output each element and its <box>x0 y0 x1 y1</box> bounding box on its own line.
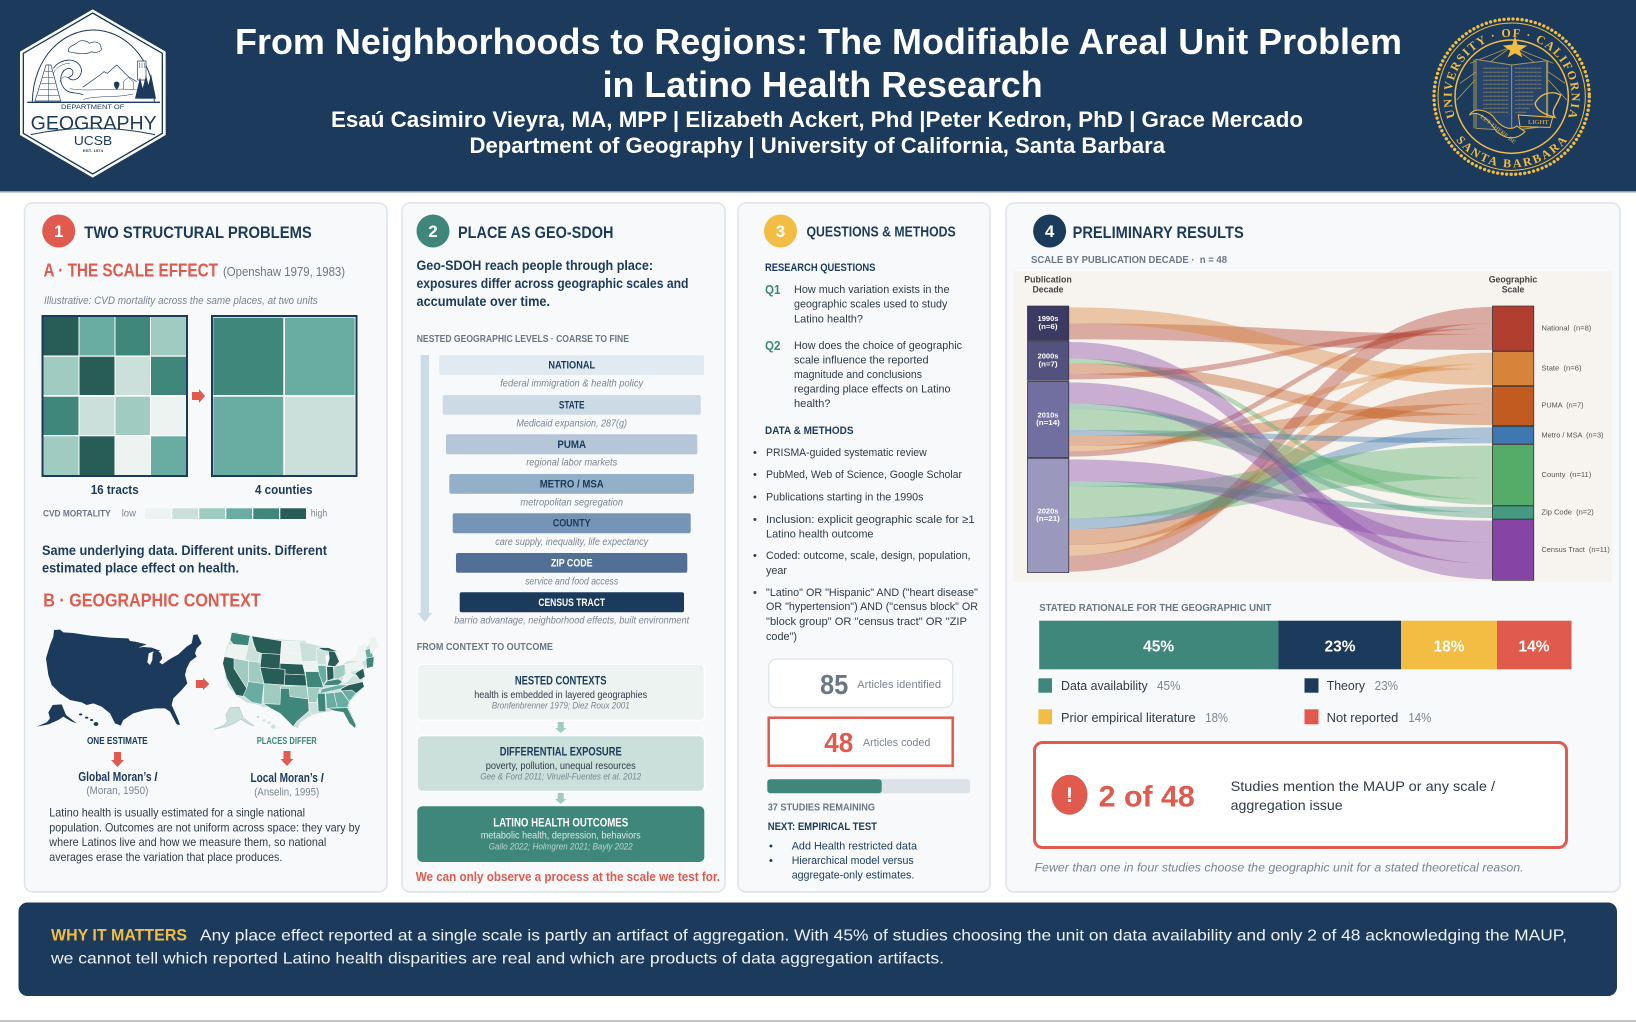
level: census tract <box>454 592 690 627</box>
icon: University of California seal: UNIVERSITY · OF · CALIFORNIA <box>1444 29 1580 119</box>
sankey axis labels: Decade <box>1032 284 1064 294</box>
scale labels: Zip Code (n=2) <box>1542 508 1594 517</box>
level: PUMA: regional labor markets <box>526 458 617 469</box>
section label: data and methods: DATA & METHODS <box>765 425 854 437</box>
progress bar <box>767 779 970 793</box>
banner: why it matters <box>18 902 1617 996</box>
bullet list: next steps: Add Health restricted data <box>792 841 918 853</box>
callout text: aggregation issue <box>1231 797 1343 813</box>
logo: UCSB Department of Geography: EST. 1974 <box>83 149 103 153</box>
question 2 <box>765 339 962 410</box>
sankey axis labels: Publication <box>1024 275 1072 285</box>
paragraph: national averages: where Latinos live and how we measure them, so national <box>48 835 326 849</box>
decade labels: 2000s <box>1038 351 1058 360</box>
grid labels: 4 counties <box>255 482 312 497</box>
sankey nodes: decades <box>1028 306 1069 573</box>
logo: UCSB Department of Geography: DEPARTMENT OF <box>61 105 125 111</box>
heading: two structural problems: TWO STRUCTURAL PROBLEMS <box>84 223 312 242</box>
level: state: Medicaid expansion, 287(g) <box>516 419 627 430</box>
bullet list: next steps: • <box>769 855 773 867</box>
sankey nodes: scales <box>1492 306 1534 580</box>
icon: University of California seal: LET THERE BE <box>1479 114 1517 146</box>
bullet list: next steps: Hierarchical model versus <box>792 855 914 867</box>
takeaway text: estimated place effect on health. <box>42 560 239 576</box>
level: PUMA <box>446 434 697 469</box>
section label: stated rationale: STATED RATIONALE FOR THE GEOGRAPHIC UNIT <box>1039 602 1272 614</box>
level: zip code: ZIP CODE <box>551 558 593 570</box>
badge 4: 4 <box>1045 222 1055 241</box>
subheading: scale effect: A · THE SCALE EFFECT <box>44 260 219 281</box>
arrow: tracts to counties <box>192 389 205 403</box>
method: Global Moran's I <box>78 769 157 797</box>
note: illustrative: Illustrative: CVD mortality across the same places, at two units <box>44 295 318 307</box>
stacked bar: rationale: 45% <box>1143 639 1174 656</box>
callout text <box>1231 778 1495 813</box>
callout text: Studies mention the MAUP or any scale / <box>1231 778 1495 794</box>
heading: preliminary results: PRELIMINARY RESULTS <box>1073 223 1244 242</box>
panel 1: two structural problems <box>24 203 387 892</box>
intro text <box>416 257 688 309</box>
scale labels: Metro / MSA (n=3) <box>1542 430 1604 439</box>
method: Local Moran's I <box>250 770 324 799</box>
level: national: NATIONAL <box>548 360 595 372</box>
icon: University of California seal <box>1432 17 1591 176</box>
decade labels: 2010s <box>1038 410 1058 419</box>
subheading: scale effect <box>44 260 345 281</box>
decade labels <box>1036 314 1060 523</box>
scale labels: Census Tract (n=11) <box>1542 545 1610 554</box>
scale labels: PUMA (n=7) <box>1542 401 1584 410</box>
badge 3 <box>764 214 797 248</box>
stacked bar: rationale: 18% <box>1434 639 1464 656</box>
bullet list: methods: PubMed, Web of Science, Google Scholar <box>766 469 962 481</box>
stat: articles coded: Articles coded <box>863 737 930 749</box>
header banner <box>0 0 1636 192</box>
level: national: federal immigration & health policy <box>500 379 644 390</box>
banner: why it matters: Any place effect reported at a single scale is partly an artifact of aggregation. With 45% of studies choosing the unit on data availability and only 2 of 48 acknowledging the MAUP, <box>200 928 1567 945</box>
question 1: How much variation exists in the <box>794 284 950 296</box>
arrow: to Local Moran's I <box>280 751 294 766</box>
stat: articles identified <box>769 659 953 708</box>
question 1 <box>765 283 950 326</box>
level: county: care supply, inequality, life expectancy <box>495 537 649 548</box>
map: single national estimate <box>37 630 202 727</box>
legend: CVD mortality: low <box>122 509 137 520</box>
section label: research questions: RESEARCH QUESTIONS <box>765 262 875 274</box>
authors and department: Esaú Casimiro Vieyra, MA, MPP | Elizabeth Ackert, Phd |Peter Kedron, PhD | Grace Mercado <box>331 107 1303 132</box>
legend: rationale: Not reported <box>1327 711 1398 725</box>
scale labels: County (n=11) <box>1542 470 1592 479</box>
arrow: context to exposure <box>555 722 566 733</box>
grid labels: 16 tracts <box>91 482 139 497</box>
decade labels: 1990s <box>1038 314 1058 323</box>
paragraph: national averages: averages erase the variation that place produces. <box>49 850 282 864</box>
box: differential exposure: Gee & Ford 2011; Viruell-Fuentes et al. 2012 <box>480 772 641 782</box>
bullet list: methods: • <box>753 447 757 459</box>
paragraph: national averages: population. Outcomes are not uniform across space: they vary by <box>49 821 360 835</box>
box: nested contexts: Bronfenbrenner 1979; Diez Roux 2001 <box>492 701 630 711</box>
legend: CVD mortality <box>43 508 327 520</box>
box: nested contexts: health is embedded in layered geographies <box>474 689 647 701</box>
sankey axis labels: Geographic <box>1489 275 1537 285</box>
badge 1 <box>42 214 75 248</box>
badge 2: 2 <box>428 222 438 241</box>
note: fewer than one in four: Fewer than one in four studies choose the geographic unit for a stated theoretical reason. <box>1034 861 1524 875</box>
level: metro <box>449 474 694 509</box>
bullet list: methods: • <box>753 492 757 504</box>
takeaway text: Same underlying data. Different units. Different <box>42 542 327 558</box>
question 1: Latino health? <box>794 314 863 326</box>
label: studies remaining: 37 STUDIES REMAINING <box>768 803 875 814</box>
map grid: 4 counties <box>212 316 356 476</box>
level: zip code: service and food access <box>525 577 618 588</box>
question 2: How does the choice of geographic <box>794 340 962 352</box>
scale labels: State (n=6) <box>1542 364 1582 373</box>
stat: articles coded: 48 <box>824 727 853 758</box>
badge 3: 3 <box>776 222 785 241</box>
logo: UCSB Department of Geography: GEOGRAPHY <box>31 113 157 134</box>
question 2: health? <box>794 398 830 410</box>
label: places differ: PLACES DIFFER <box>257 736 317 747</box>
method: Global Moran's I: Global Moran’s I <box>78 769 157 784</box>
bullet list: methods: "block group" OR "census tract" OR "ZIP <box>766 616 967 628</box>
arrow: to Global Moran's I <box>111 752 124 767</box>
level: state <box>443 395 701 430</box>
icon: exclamation: ! <box>1066 784 1073 807</box>
level: census tract: barrio advantage, neighborhood effects, built environment <box>454 616 690 627</box>
icon: University of California seal: SANTA BARBARA <box>1456 136 1568 168</box>
level: census tract: CENSUS TRACT <box>538 597 605 609</box>
bullet list: methods: OR "hypertension") AND ("census block" OR <box>766 601 978 613</box>
bullet list: next steps: • <box>769 841 773 853</box>
bullet list: methods: Publications starting in the 1990s <box>766 492 924 504</box>
section label: context to outcome: FROM CONTEXT TO OUTCOME <box>417 642 553 653</box>
box: latino health outcomes: Gallo 2022; Holmgren 2021; Bayly 2022 <box>489 842 633 852</box>
section label: nested levels: NESTED GEOGRAPHIC LEVELS · COARSE TO FINE <box>417 334 629 345</box>
callout number: 2 of 48 <box>1099 781 1195 814</box>
question 1: Q1 <box>765 283 781 297</box>
sankey axis labels: Scale <box>1502 284 1524 294</box>
sankey chart <box>1013 271 1612 582</box>
title <box>235 21 1402 105</box>
intro text: Geo-SDOH reach people through place: <box>416 257 653 273</box>
bullet list: methods: code") <box>766 631 797 643</box>
level: state: STATE <box>559 400 585 412</box>
decade labels: 2020s <box>1038 506 1058 515</box>
level: metro: metropolitan segregation <box>520 498 623 509</box>
bullet list: methods: • <box>753 587 757 599</box>
box: latino health outcomes: metabolic health, depression, behaviors <box>481 830 641 842</box>
heading: questions and methods: QUESTIONS & METHODS <box>806 224 956 240</box>
legend: CVD mortality: high <box>311 509 327 520</box>
decade labels: (n=7) <box>1038 359 1058 368</box>
bullet list: next steps: aggregate-only estimates. <box>792 870 914 882</box>
bullet list: methods: • <box>753 514 757 526</box>
logo: UCSB Department of Geography: UCSB <box>74 134 112 148</box>
map: states differ <box>214 632 379 729</box>
legend: rationale: Data availability <box>1061 679 1148 693</box>
bullet list: methods <box>753 447 978 643</box>
scale labels <box>1542 323 1610 554</box>
level: metro: METRO / MSA <box>540 479 604 491</box>
level: zip code <box>456 553 687 588</box>
box: differential exposure: poverty, pollution, unequal resources <box>486 760 636 772</box>
sankey flows <box>1069 307 1492 579</box>
icon: exclamation <box>1052 775 1088 815</box>
banner: why it matters: we cannot tell which reported Latino health disparities are real and which are products of data aggregation artifacts. <box>50 950 944 967</box>
bullet list: methods: • <box>753 550 757 562</box>
box: differential exposure: DIFFERENTIAL EXPOSURE <box>500 745 622 759</box>
badge 1: 1 <box>54 222 63 241</box>
method: Local Moran's I: Local Moran’s I <box>250 770 324 785</box>
subheading: geographic context: B · GEOGRAPHIC CONTEXT <box>43 590 261 611</box>
bullet list: methods: Coded: outcome, scale, design, population, <box>766 550 970 562</box>
grid labels <box>91 482 312 497</box>
callout: 2 of 48 <box>1034 742 1566 848</box>
subheading: scale effect: (Openshaw 1979, 1983) <box>223 264 345 279</box>
question 2: regarding place effects on Latino <box>794 384 950 396</box>
badge 2 <box>416 214 450 248</box>
panel 3: questions and methods <box>738 203 990 892</box>
box: latino health outcomes <box>417 806 704 862</box>
paragraph: national averages: Latino health is usually estimated for a single national <box>49 806 305 820</box>
arrow: exposure to outcomes <box>555 793 566 804</box>
box: nested contexts <box>417 664 704 720</box>
legend: rationale: 18% <box>1205 711 1228 725</box>
legend: rationale <box>1038 678 1431 725</box>
level: national <box>439 355 704 390</box>
scale labels: National (n=8) <box>1542 323 1592 332</box>
authors and department <box>331 107 1303 158</box>
heading: place as geo-SDOH: PLACE AS GEO-SDOH <box>458 223 614 242</box>
legend: rationale: 23% <box>1375 679 1398 693</box>
bullet list: methods: Latino health outcome <box>766 528 874 540</box>
stat: articles coded <box>769 718 953 766</box>
question 2: Q2 <box>765 339 781 353</box>
question 2: magnitude and conclusions <box>794 369 922 381</box>
level: PUMA: PUMA <box>557 439 586 451</box>
method: Global Moran's I: (Moran, 1950) <box>86 785 148 797</box>
logo: UCSB Department of Geography <box>20 9 166 178</box>
bullet list: methods: "Latino" OR "Hispanic" AND ("heart disease" <box>766 587 978 599</box>
decade labels: (n=14) <box>1036 418 1060 427</box>
level: county: COUNTY <box>553 518 591 530</box>
icon: University of California seal: LIGHT <box>1528 119 1549 126</box>
label: next step: NEXT: EMPIRICAL TEST <box>768 821 877 833</box>
bullet list: methods: Inclusion: explicit geographic scale for ≥1 <box>766 514 975 526</box>
method: Local Moran's I: (Anselin, 1995) <box>254 787 319 799</box>
label: one estimate: ONE ESTIMATE <box>87 736 148 747</box>
panel 2: place as geo-SDOH <box>402 203 725 892</box>
question 2: scale influence the reported <box>794 354 929 366</box>
chart subtitle: SCALE BY PUBLICATION DECADE · n = 48 <box>1031 255 1227 266</box>
bullet list: next steps <box>769 841 918 882</box>
stacked bar: rationale <box>1039 621 1572 669</box>
takeaway text <box>42 542 327 576</box>
stat: articles identified: Articles identified <box>857 679 941 691</box>
stat: articles identified: 85 <box>820 669 848 700</box>
box: latino health outcomes: LATINO HEALTH OUTCOMES <box>493 816 628 830</box>
legend: rationale: Theory <box>1327 679 1366 693</box>
legend: CVD mortality: CVD MORTALITY <box>43 509 111 520</box>
paragraph: national averages <box>48 806 360 864</box>
question 1: geographic scales used to study <box>794 298 948 310</box>
banner: why it matters: WHY IT MATTERS <box>51 926 187 945</box>
decade labels: (n=21) <box>1036 514 1060 523</box>
stacked bar: rationale: 14% <box>1518 639 1550 656</box>
nested level bars <box>439 355 704 627</box>
level: county <box>453 513 691 548</box>
decade labels: (n=6) <box>1038 322 1058 331</box>
bullet list: methods: year <box>766 565 787 577</box>
bullet list: methods: • <box>753 469 757 481</box>
badge 4 <box>1033 214 1066 248</box>
arrow: national to local <box>196 678 209 690</box>
intro text: accumulate over time. <box>416 293 550 309</box>
box: differential exposure <box>417 736 704 791</box>
legend: rationale: Prior empirical literature <box>1061 711 1196 725</box>
arrow: coarse to fine <box>417 355 432 622</box>
legend: rationale: 45% <box>1157 679 1180 693</box>
sankey axis labels <box>1024 275 1537 294</box>
map grid: 16 tracts <box>42 316 187 476</box>
legend: rationale: 14% <box>1408 711 1431 725</box>
panel 4: preliminary results <box>1006 203 1620 892</box>
authors and department: Department of Geography | University of California, Santa Barbara <box>470 133 1166 158</box>
title: From Neighborhoods to Regions: The Modifiable Areal Unit Problem <box>235 21 1402 62</box>
box: nested contexts: NESTED CONTEXTS <box>515 674 607 688</box>
title: in Latino Health Research <box>603 64 1043 105</box>
stacked bar: rationale: 23% <box>1324 639 1356 656</box>
callout: scale we test for: We can only observe a process at the scale we test for. <box>416 869 720 884</box>
bullet list: methods: PRISMA-guided systematic review <box>766 447 927 459</box>
intro text: exposures differ across geographic scales and <box>416 275 688 291</box>
